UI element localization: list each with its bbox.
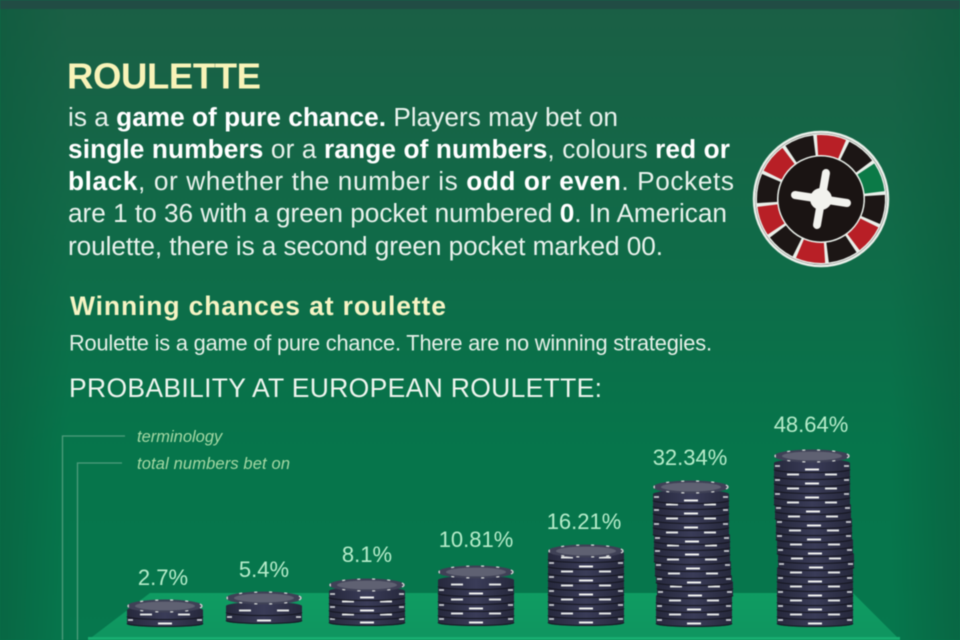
stack 48.64% (774, 450, 854, 627)
percentage labels: 32.34% (653, 445, 727, 470)
title: ROULETTE: ROULETTE (67, 56, 261, 96)
stack 8.1% (329, 578, 405, 626)
intro text block: single numbers or a range of numbers, colours red or (68, 134, 730, 164)
heading: winning chances: Winning chances at roulette (70, 291, 446, 321)
percentage labels: 8.1% (342, 542, 392, 567)
intro text block (68, 102, 734, 261)
percentage labels: 10.81% (439, 527, 513, 552)
green table (88, 593, 900, 640)
legend: terminology and total numbers: total numbers bet on (137, 455, 290, 473)
intro text block: black, or whether the number is odd or even. Pockets (68, 166, 734, 196)
heading: probability: PROBABILITY AT EUROPEAN ROULETTE: (69, 373, 602, 403)
chart: chip stacks (127, 450, 854, 627)
stack 32.34% (653, 480, 733, 627)
icon: roulette wheel (746, 124, 896, 274)
legend: terminology and total numbers: terminology (137, 428, 224, 446)
percentage labels: 48.64% (774, 412, 848, 437)
intro text block: are 1 to 36 with a green pocket numbered 0. In American (68, 198, 727, 228)
percentage labels (138, 412, 848, 590)
percentage labels: 2.7% (138, 565, 188, 590)
stack 10.81% (438, 566, 514, 626)
text: no winning strategies: Roulette is a game of pure chance. There are no winning strategies. (69, 330, 712, 356)
stack 16.21% (548, 544, 624, 626)
percentage labels: 16.21% (547, 509, 621, 534)
stack 2.7% (127, 600, 203, 627)
legend: terminology and total numbers (62, 428, 290, 640)
stack 5.4% (226, 592, 302, 624)
intro text block: roulette, there is a second green pocket marked 00. (68, 231, 663, 261)
intro text block: is a game of pure chance. Players may bet on (68, 102, 618, 132)
percentage labels: 5.4% (239, 557, 289, 582)
